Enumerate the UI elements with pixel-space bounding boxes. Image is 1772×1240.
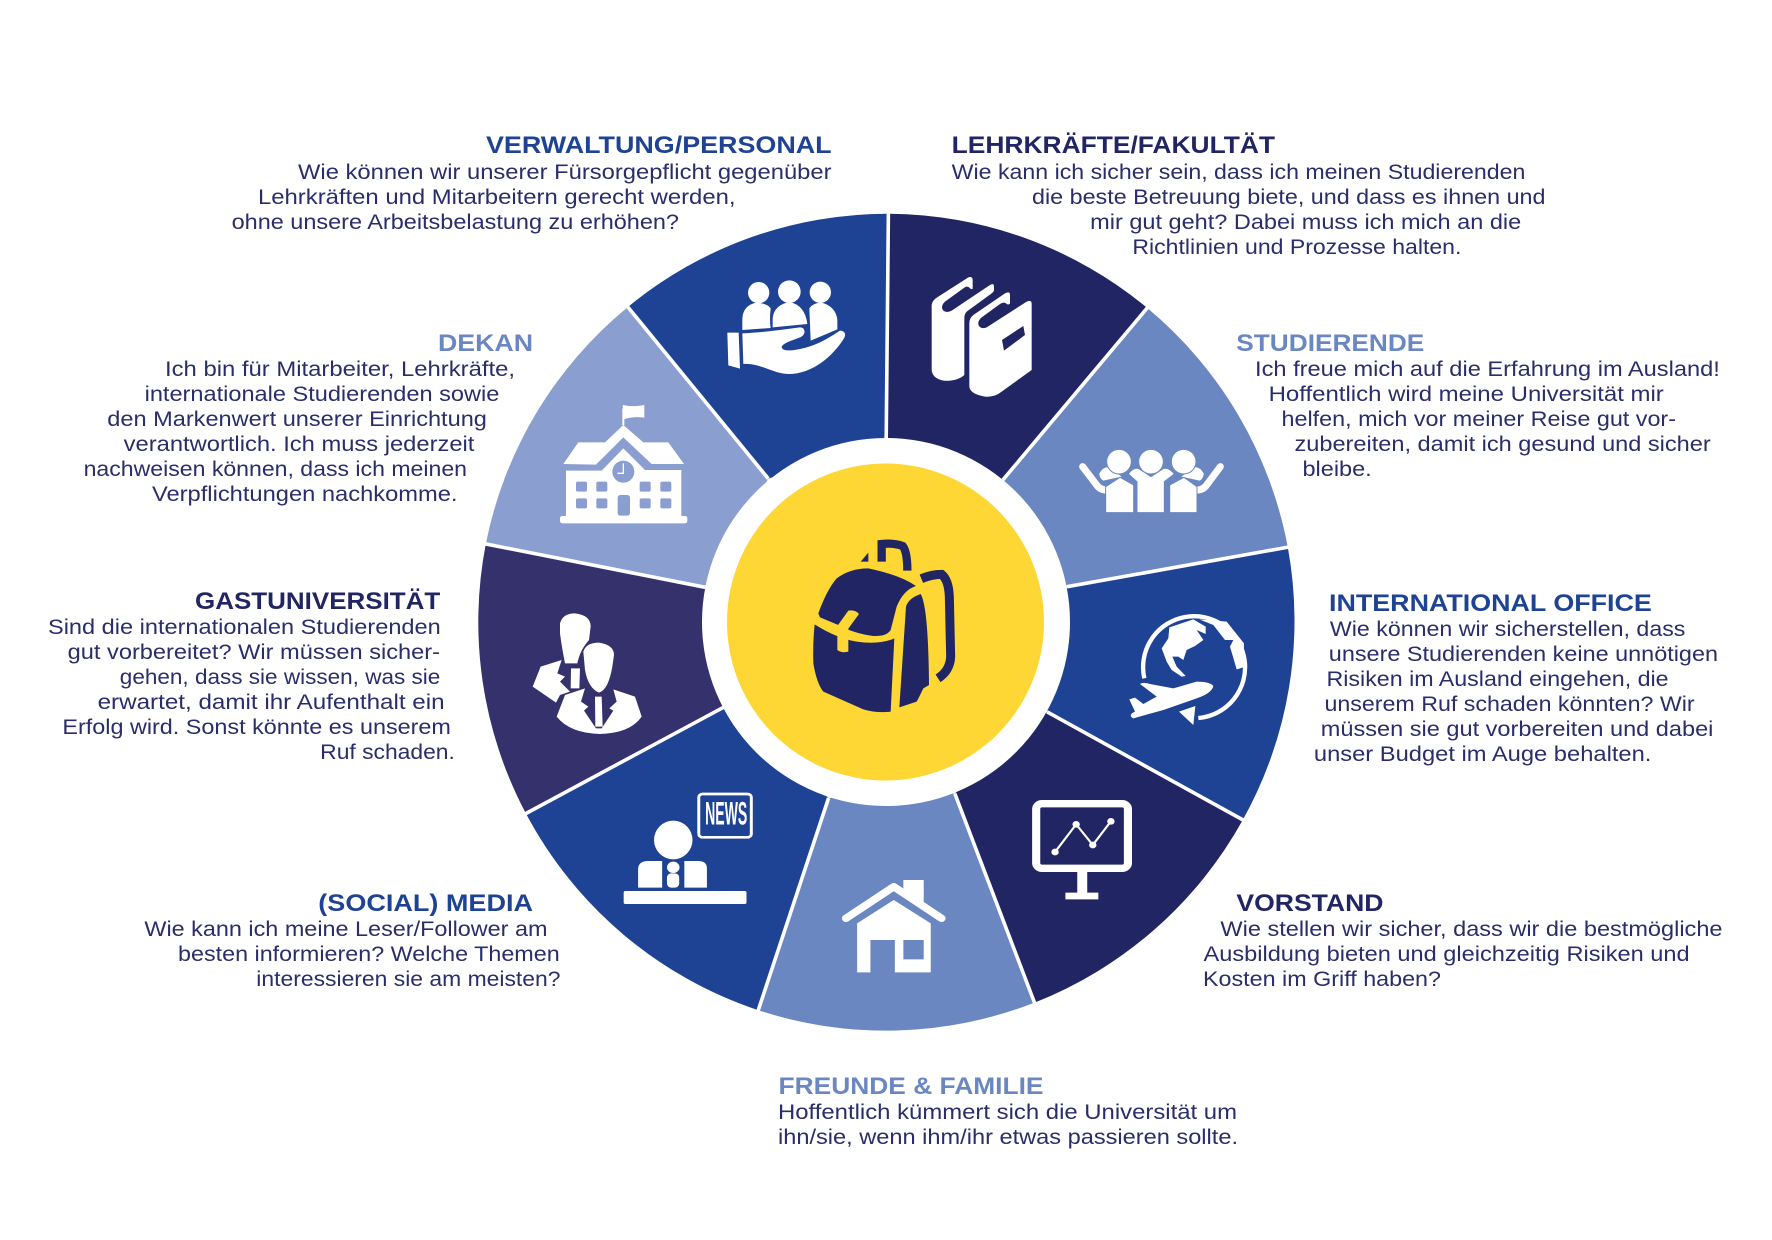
segment: Verwaltung (628, 214, 888, 479)
text: Gastuniversität (48, 588, 455, 764)
body: gut vorbereitet? Wir müssen sicher- (68, 640, 440, 664)
text: International Office (1314, 590, 1718, 766)
body: nachweisen können, dass ich meinen (84, 457, 467, 481)
segment: Gastuniversität (478, 544, 723, 813)
heading: DEKAN (438, 330, 533, 357)
body: gehen, dass sie wissen, was sie (120, 665, 440, 689)
heading: STUDIERENDE (1236, 330, 1424, 357)
heading: (SOCIAL) MEDIA (318, 890, 533, 917)
body: den Markenwert unserer Einrichtung (107, 407, 487, 431)
body (1314, 617, 1718, 766)
text: Studierende (1236, 330, 1720, 481)
body: Wie kann ich sicher sein, dass ich meinen Studierenden (952, 160, 1525, 184)
body: interessieren sie am meisten? (256, 967, 561, 991)
yellow centre disc (727, 464, 1044, 780)
body (1203, 917, 1722, 991)
body: Sind die internationalen Studierenden (48, 615, 441, 639)
icon: books (932, 277, 1032, 397)
body: helfen, mich vor meiner Reise gut vor- (1282, 407, 1676, 431)
heading: VERWALTUNG/PERSONAL (486, 132, 832, 159)
body: die beste Betreuung biete, und dass es ihnen und (1032, 185, 1546, 209)
infographic: NEWS (705, 796, 747, 832)
text: Vorstand (1203, 890, 1722, 991)
segment: Studierende (1003, 308, 1288, 587)
segment: Lehrkräfte (886, 214, 1147, 480)
segment: Dekan (486, 307, 768, 587)
wheel (478, 212, 1294, 1031)
body: Wie stellen wir sicher, dass wir die bestmögliche (1220, 917, 1722, 941)
body: Verpflichtungen nachkomme. (152, 482, 458, 506)
white ring (702, 438, 1070, 806)
body: Hoffentlich wird meine Universität mir (1269, 382, 1664, 406)
body: müssen sie gut vorbereiten und dabei (1321, 717, 1713, 741)
body: Lehrkräften und Mitarbeitern gerecht werden, (258, 185, 736, 209)
icon: business people (533, 613, 642, 734)
body: Richtlinien und Prozesse halten. (1132, 235, 1461, 259)
text: Freunde und Familie (778, 1073, 1238, 1149)
body (778, 1100, 1238, 1149)
body: Hoffentlich kümmert sich die Universität um (778, 1100, 1237, 1124)
icon: people on a hand (727, 280, 845, 374)
body: Ausbildung bieten und gleichzeitig Risiken und (1204, 942, 1690, 966)
body: Wie können wir unserer Fürsorgepflicht gegenüber (298, 160, 832, 184)
body: Kosten im Griff haben? (1203, 967, 1441, 991)
body (144, 917, 561, 991)
body: Ich freue mich auf die Erfahrung im Ausland! (1255, 357, 1720, 381)
body (952, 160, 1546, 259)
body (1255, 357, 1720, 481)
body: zubereiten, damit ich gesund und sicher (1294, 432, 1711, 456)
body: unser Budget im Auge behalten. (1314, 742, 1651, 766)
segment: Freunde und Familie (758, 794, 1035, 1031)
body: internationale Studierenden sowie (145, 382, 499, 406)
body: Wie können wir sicherstellen, dass (1330, 617, 1685, 641)
text: Dekan (84, 330, 533, 506)
body: Wie kann ich meine Leser/Follower am (144, 917, 548, 941)
segment: Vorstand (955, 712, 1243, 1003)
heading: FREUNDE & FAMILIE (778, 1073, 1044, 1100)
body: Risiken im Ausland eingehen, die (1326, 667, 1669, 691)
body (232, 160, 832, 234)
body: unserem Ruf schaden könnten? Wir (1324, 692, 1695, 716)
body (84, 357, 515, 506)
heading: VORSTAND (1236, 890, 1384, 917)
icon: students (1083, 449, 1220, 513)
heading: LEHRKRÄFTE/FAKULTÄT (952, 132, 1275, 159)
icon: globe and plane (1129, 616, 1245, 725)
body: erwartet, damit ihr Aufenthalt ein (98, 690, 445, 714)
body: Ruf schaden. (320, 740, 455, 764)
heading: INTERNATIONAL OFFICE (1329, 590, 1652, 617)
text: Lehrkräfte/Fakultät (952, 132, 1546, 259)
icon: school building (560, 405, 687, 523)
icon: backpack (813, 544, 951, 712)
body: ohne unsere Arbeitsbelastung zu erhöhen? (232, 210, 679, 234)
icon: house (846, 880, 941, 972)
segment: Social Media (526, 707, 829, 1010)
heading: GASTUNIVERSITÄT (195, 588, 441, 615)
body: Ich bin für Mitarbeiter, Lehrkräfte, (165, 357, 515, 381)
body: besten informieren? Welche Themen (178, 942, 560, 966)
text: Social Media (144, 890, 561, 991)
body (48, 615, 455, 764)
text: Verwaltung/Personal (232, 132, 832, 234)
body: verantwortlich. Ich muss jederzeit (124, 432, 474, 456)
icon: presentation monitor (1036, 804, 1128, 899)
body: Erfolg wird. Sonst könnte es unserem (62, 715, 451, 739)
segment: International Office (1047, 547, 1294, 820)
body: ihn/sie, wenn ihm/ihr etwas passieren sollte. (778, 1125, 1238, 1149)
icon: news presenter (624, 794, 751, 904)
body: unsere Studierenden keine unnötigen (1329, 642, 1718, 666)
body: mir gut geht? Dabei muss ich mich an die (1090, 210, 1521, 234)
body: bleibe. (1302, 457, 1372, 481)
